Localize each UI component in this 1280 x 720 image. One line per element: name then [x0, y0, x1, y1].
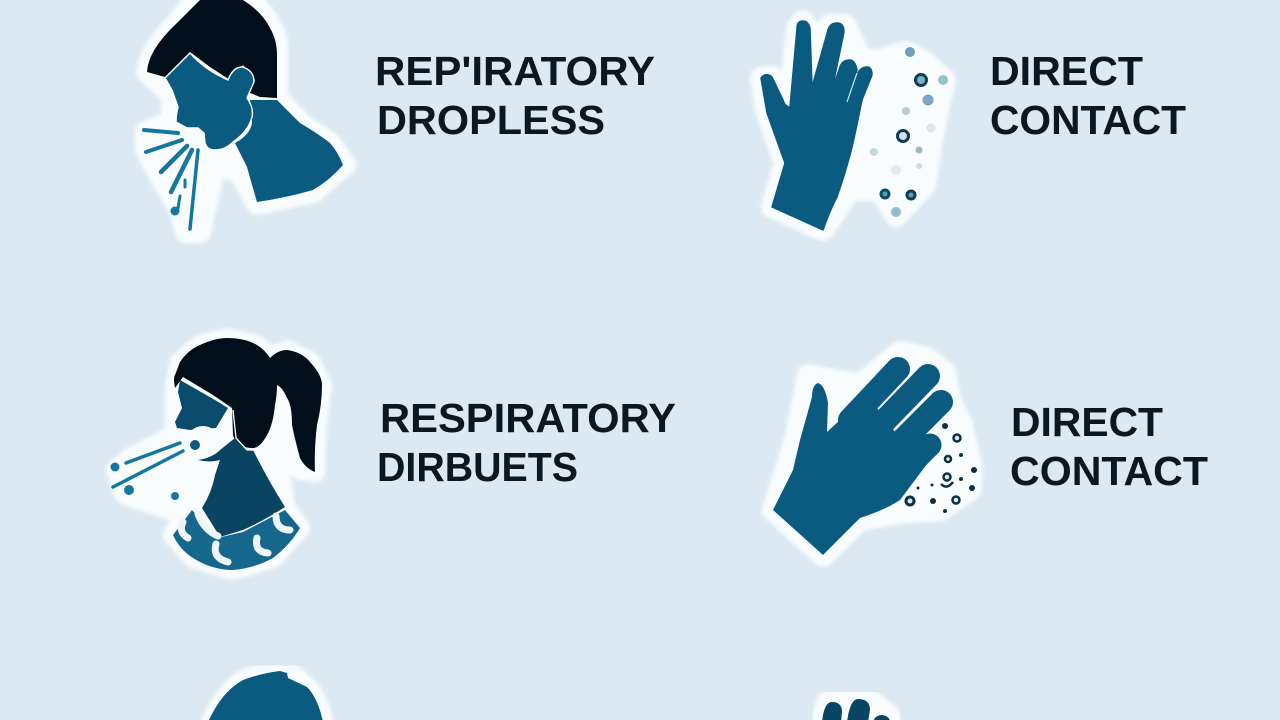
icon: fingertips cropped at bottom: [820, 695, 893, 720]
face: [165, 53, 254, 150]
icon: person coughing respiratory droplets: [144, 0, 345, 232]
mask: [186, 426, 220, 460]
heading: respiratory dirbuets: [377, 395, 676, 490]
particles: [870, 47, 948, 217]
ponytail and hair: [174, 338, 322, 472]
particles: [906, 423, 977, 513]
heading: respiratory droples: DROPLESS: [377, 97, 605, 143]
heading: direct contact second: [1010, 399, 1208, 494]
face: [175, 380, 228, 430]
heading: direct contact: [990, 48, 1186, 143]
heading: direct contact: CONTACT: [990, 97, 1186, 143]
hair: [147, 0, 277, 98]
heading: direct contact: DIRECT: [990, 48, 1143, 94]
heading: respiratory droples: [375, 48, 655, 143]
neck: [198, 438, 285, 537]
fingers: [850, 369, 941, 490]
icon: woman with mask breathing out droplets: [110, 338, 322, 570]
hand: [761, 21, 872, 230]
hand palm and thumb: [773, 383, 930, 555]
cough spray: [144, 130, 198, 229]
finger highlight: [847, 73, 857, 102]
icon: waving hand with particles: [773, 352, 977, 556]
neck outline: [233, 410, 253, 450]
neck: [235, 100, 343, 202]
heading: respiratory dirbuets: RESPIRATORY: [380, 395, 676, 441]
heading: respiratory droples: REP'IRATORY: [375, 48, 655, 94]
breath spray: [113, 443, 183, 487]
icon: hand with contact particles: [761, 21, 948, 230]
heading: respiratory dirbuets: DIRBUETS: [377, 444, 578, 490]
heading: direct contact second: CONTACT: [1010, 448, 1208, 494]
patterned shirt: [173, 510, 300, 570]
heading: direct contact second: DIRECT: [1011, 399, 1163, 445]
icon: head cropped at bottom: [208, 671, 323, 720]
